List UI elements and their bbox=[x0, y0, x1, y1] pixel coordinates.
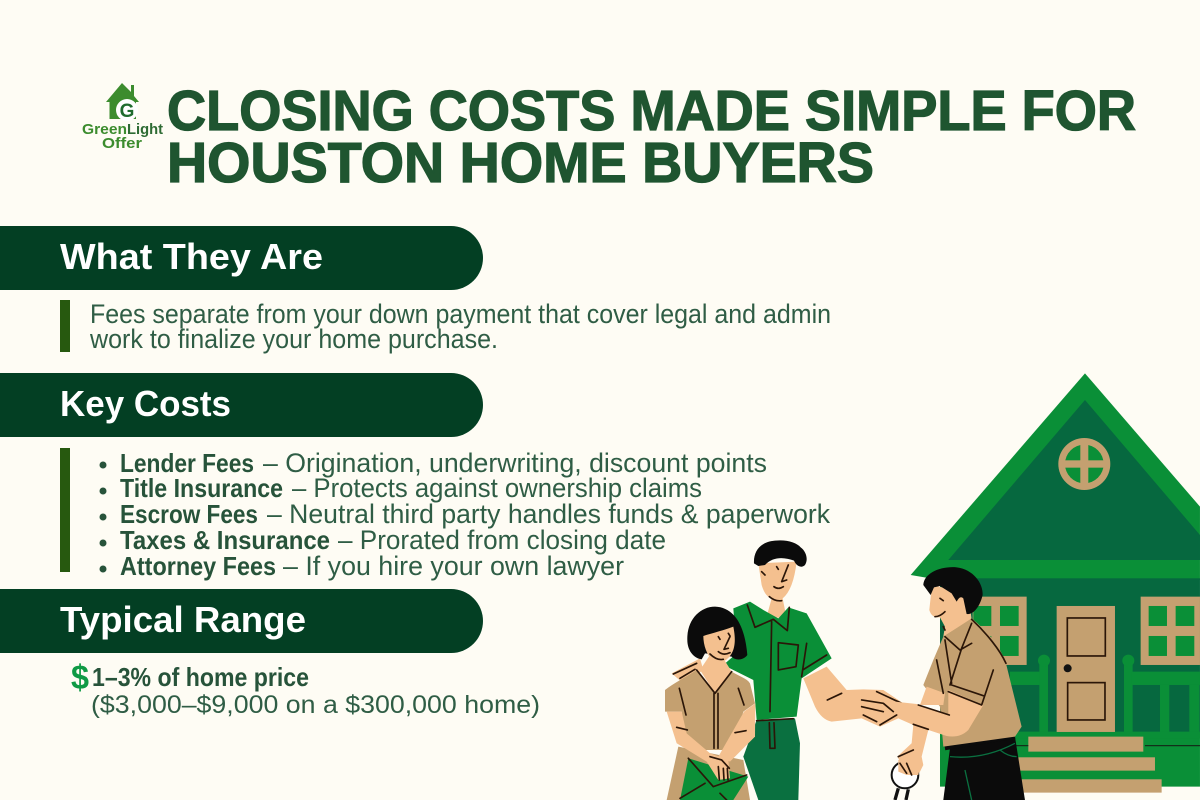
wall bbox=[940, 578, 1200, 738]
steps bbox=[1018, 737, 1162, 793]
icon: GreenLight Offer logo: Offer bbox=[102, 135, 142, 152]
icon: GreenLight Offer logo: Green bbox=[82, 121, 127, 138]
panel: key costs bbox=[0, 373, 830, 581]
panel: typical range bbox=[0, 589, 540, 719]
figure: agent bbox=[892, 567, 1025, 800]
text block: range bbox=[91, 662, 540, 719]
icon: dollar sign: $ bbox=[71, 659, 89, 697]
heading: typical range: Typical Range bbox=[60, 599, 306, 640]
illustration: people shaking hands bbox=[665, 540, 1025, 800]
roof bbox=[911, 373, 1200, 580]
icon: round window bbox=[1058, 438, 1110, 490]
list: cost items: – If you hire your own lawyer bbox=[283, 551, 624, 581]
icon: GreenLight Offer logo: G bbox=[120, 101, 134, 122]
heading: typical range bbox=[0, 589, 483, 653]
accent bar bbox=[60, 300, 70, 352]
gable bbox=[948, 400, 1200, 560]
door bbox=[1057, 606, 1115, 732]
icon: GreenLight Offer logo: Light bbox=[127, 121, 163, 138]
text block: definition: Fees separate from your down payment that cover legal and admin bbox=[90, 299, 831, 329]
title bbox=[167, 79, 1136, 195]
panel: what they are bbox=[0, 226, 831, 354]
title: CLOSING COSTS MADE SIMPLE FOR bbox=[167, 79, 1136, 143]
list: cost items: – Prorated from closing date bbox=[338, 525, 666, 555]
figure: man bbox=[723, 540, 903, 800]
text block: range: ($3,000–$9,000 on a $300,000 home) bbox=[91, 691, 540, 719]
list: cost items: – Protects against ownership claims bbox=[292, 473, 702, 503]
text block: definition: work to finalize your home purchase. bbox=[89, 324, 498, 354]
text block: range: 1–3% of home price bbox=[92, 662, 309, 692]
icon: keys bbox=[892, 750, 922, 800]
figure: woman bbox=[665, 607, 755, 800]
text block: definition bbox=[89, 299, 831, 354]
heading: key costs bbox=[0, 373, 483, 437]
list: cost items: Lender Fees bbox=[120, 448, 254, 478]
lower base bbox=[940, 733, 1200, 787]
list: cost items: Attorney Fees bbox=[120, 551, 276, 581]
list: cost items: – Neutral third party handles funds & paperwork bbox=[267, 499, 830, 529]
heading: what they are bbox=[0, 226, 483, 290]
accent bar bbox=[60, 448, 70, 572]
right window bbox=[1141, 597, 1200, 665]
list: cost items: Title Insurance bbox=[120, 473, 283, 503]
list: cost items bbox=[100, 448, 830, 581]
heading: what they are: What They Are bbox=[60, 236, 323, 277]
left window bbox=[973, 597, 1027, 665]
title: HOUSTON HOME BUYERS bbox=[167, 131, 874, 195]
list: cost items: Taxes & Insurance bbox=[120, 525, 330, 555]
heading: key costs: Key Costs bbox=[60, 383, 231, 424]
icon: GreenLight Offer logo bbox=[82, 83, 163, 152]
illustration: house bbox=[911, 373, 1200, 793]
list: cost items: Escrow Fees bbox=[120, 499, 258, 529]
list: cost items: – Origination, underwriting, discount points bbox=[263, 448, 767, 478]
porch railing bbox=[1010, 655, 1200, 738]
